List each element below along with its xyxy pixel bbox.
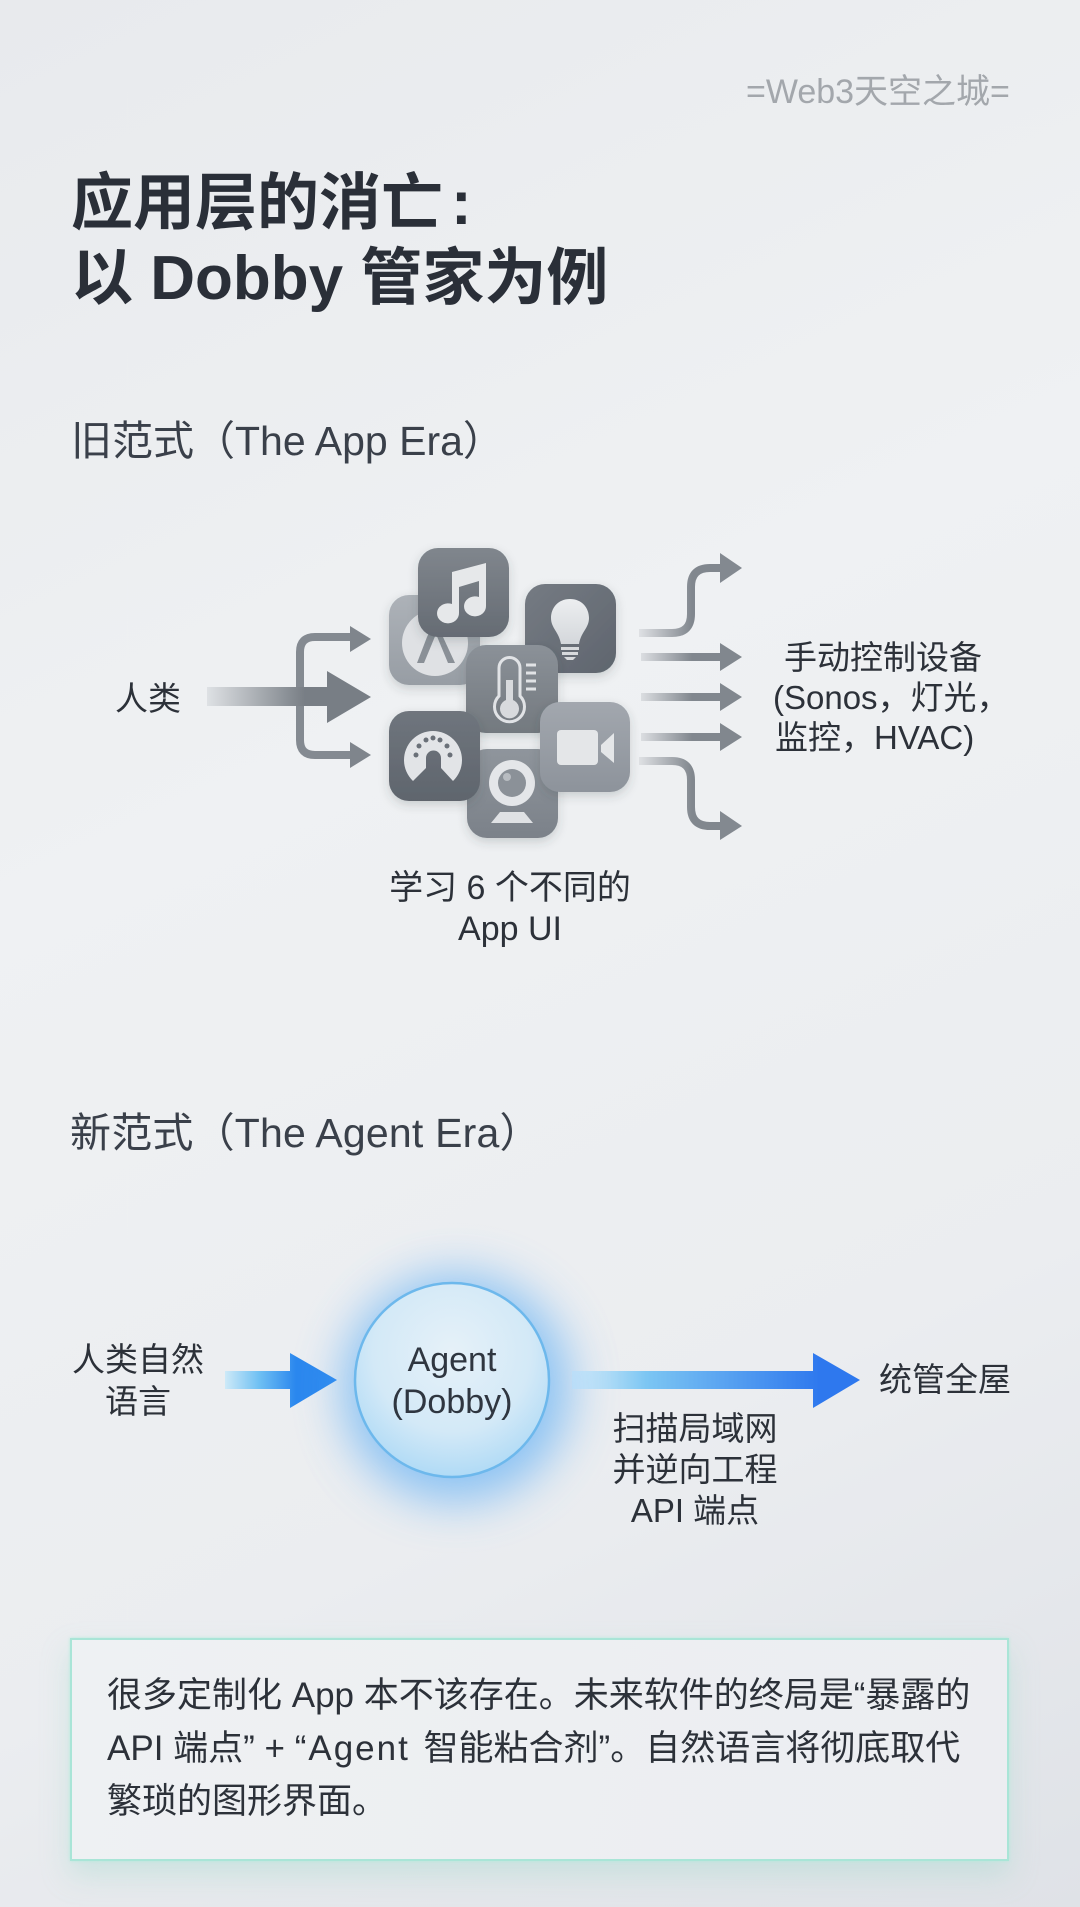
label: learn six apps: App UI: [458, 910, 562, 948]
heading: new paradigm: 新范式（The Agent Era）: [70, 1110, 541, 1156]
callout text: 很多定制化 App 本不该存在。未来软件的终局是“暴露的: [107, 1676, 970, 1715]
callout text: 繁琐的图形界面。: [107, 1782, 387, 1821]
icon: light bulb: [525, 584, 616, 673]
agent orb: [342, 1274, 570, 1502]
arrows: apps out to devices: [639, 553, 742, 840]
title: 应用层的消亡:: [71, 169, 472, 238]
heading: old paradigm: 旧范式（The App Era）: [71, 418, 504, 464]
label: agent: Agent: [408, 1341, 496, 1379]
icon: music: [418, 548, 509, 637]
label: scan lan: [612, 1410, 778, 1529]
label: learn six apps: [389, 869, 631, 948]
arrows: human into apps: [207, 626, 371, 768]
icon: thermometer: [466, 645, 558, 733]
icon: app store: [389, 595, 480, 685]
label: scan lan: API 端点: [631, 1492, 759, 1529]
label: output devices: 手动控制设备: [784, 639, 982, 676]
icon: webcam: [467, 749, 558, 838]
label: whole home: 统管全屋: [879, 1361, 1011, 1398]
label: scan lan: 扫描局域网: [612, 1410, 778, 1447]
label: human: 人类: [115, 680, 181, 717]
icon: video camera: [540, 702, 630, 792]
label: learn six apps: 学习 6 个不同的: [389, 869, 631, 907]
title: [71, 169, 608, 313]
callout text: API 端点” + “Agent 智能粘合剂”。自然语言将彻底取代: [107, 1729, 960, 1768]
label: agent: [392, 1341, 512, 1421]
watermark: =Web3天空之城=: [746, 73, 1010, 111]
label: natural language: 语言: [105, 1383, 171, 1420]
callout box: [70, 1638, 1009, 1861]
title: 以 Dobby 管家为例: [71, 244, 608, 313]
label: output devices: (Sonos，灯光，: [773, 679, 1010, 716]
label: natural language: [72, 1341, 204, 1420]
label: agent: (Dobby): [392, 1383, 512, 1421]
label: scan lan: 并逆向工程: [612, 1451, 778, 1488]
label: output devices: [773, 639, 1010, 756]
callout text: [107, 1676, 970, 1821]
icon: gauge: [389, 711, 480, 801]
arrow: language into agent: [225, 1353, 337, 1408]
arrow: agent out to whole home: [572, 1353, 860, 1408]
label: natural language: 人类自然: [72, 1341, 204, 1378]
label: output devices: 监控，HVAC): [775, 719, 974, 756]
